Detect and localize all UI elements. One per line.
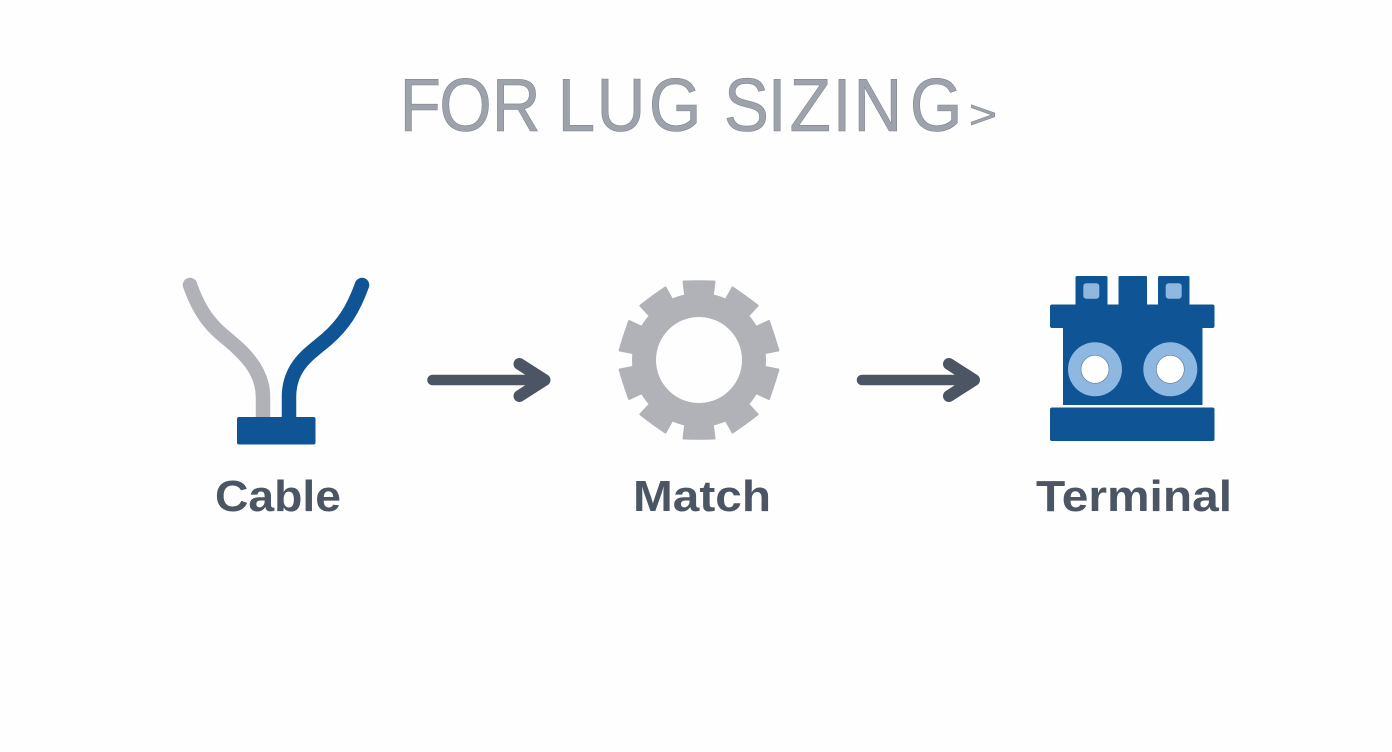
arrow: cable to match <box>432 364 544 396</box>
icon: terminal block <box>1050 276 1214 441</box>
label: match: Match <box>633 472 771 521</box>
title: FOR LUG SIZING <box>400 64 962 148</box>
arrow: match to terminal <box>862 364 974 396</box>
icon: gear <box>618 280 780 440</box>
step: match <box>618 280 780 521</box>
label: cable: Cable <box>215 472 341 521</box>
label: terminal: Terminal <box>1036 472 1232 521</box>
step: cable <box>190 285 362 521</box>
title: > <box>969 93 997 137</box>
step: terminal <box>1036 276 1232 521</box>
icon: cable with two wires <box>190 285 362 444</box>
